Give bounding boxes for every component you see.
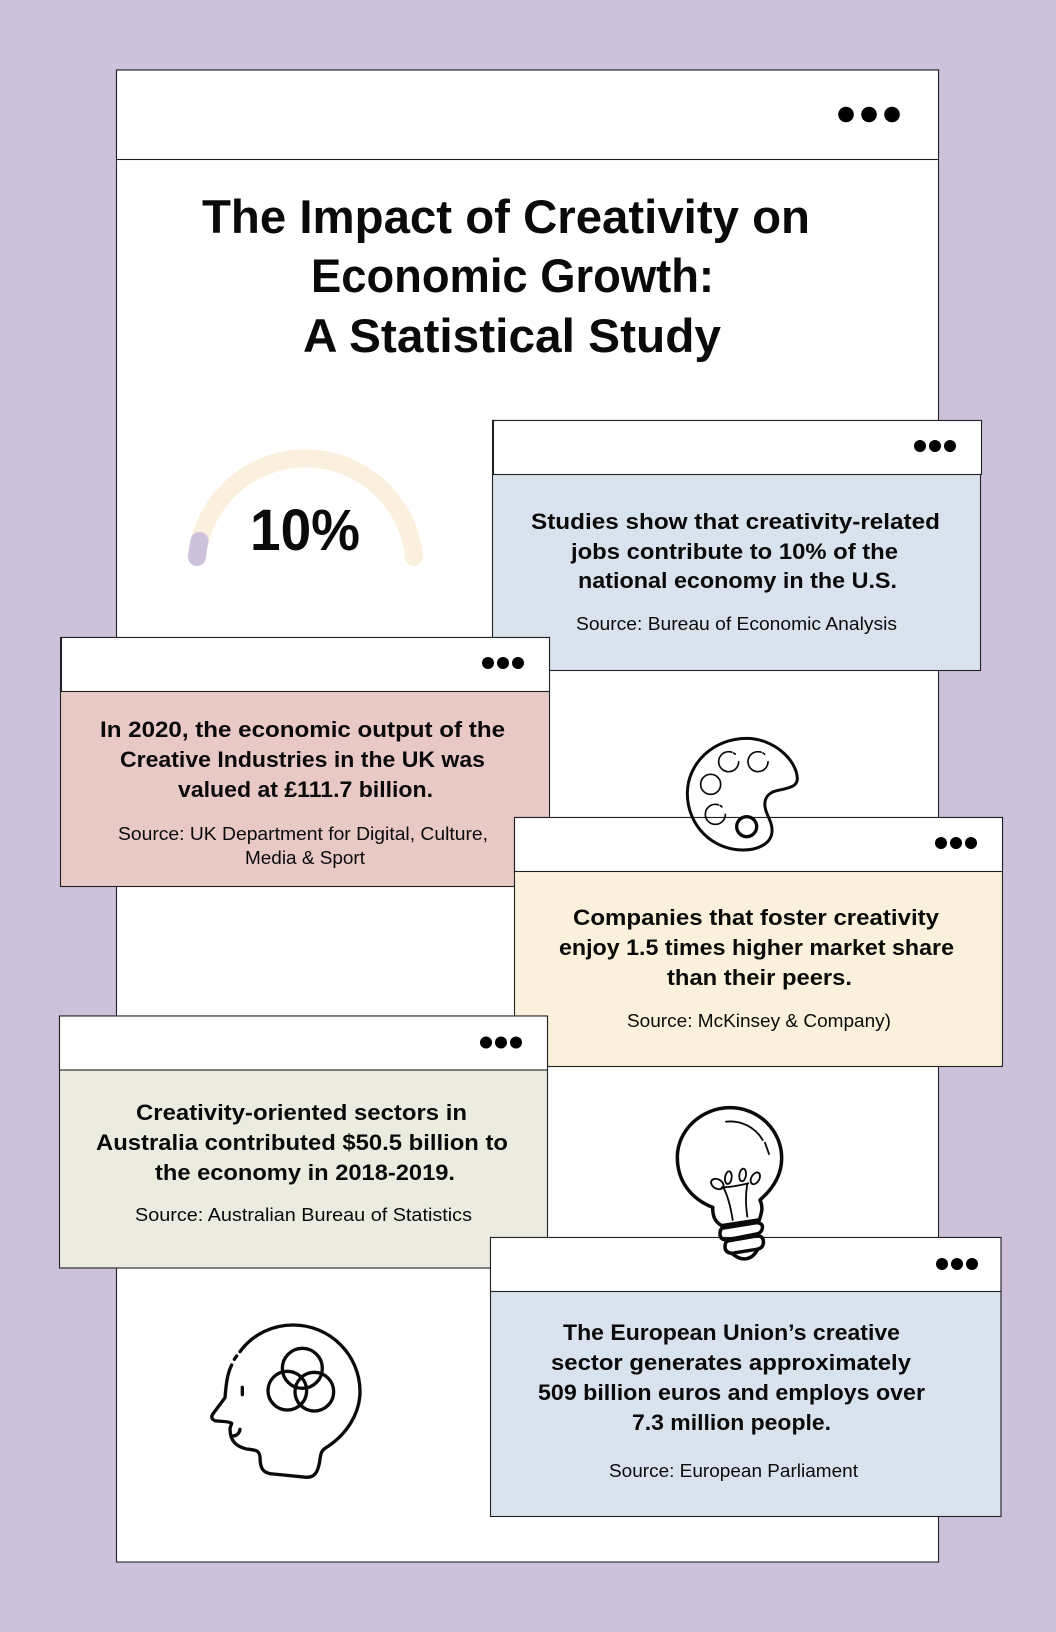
panel: European Union sector: 7.3 million people.: [632, 1410, 831, 1435]
title: The Impact of Creativity on: [202, 190, 810, 243]
panel: Australia sectors: the economy in 2018-2019.: [155, 1160, 455, 1185]
title: Economic Growth:: [311, 249, 714, 302]
panel: companies market share: [514, 818, 1002, 1066]
panel: US creative jobs: Studies show that creativity-related: [531, 509, 940, 534]
panel: UK creative industries: [60, 638, 550, 886]
main panel: [116, 70, 938, 1562]
icon: light bulb: [677, 1108, 782, 1259]
panel: UK creative industries: Creative Industries in the UK was: [120, 747, 485, 772]
icon: head with overlapping circles: [212, 1325, 360, 1477]
panel: European Union sector: The European Union’s creative: [563, 1320, 900, 1345]
panel: European Union sector: [490, 1238, 1001, 1516]
panel: UK creative industries: Source: UK Department for Digital, Culture,: [118, 824, 488, 844]
panel: companies market share: than their peers.: [667, 965, 852, 990]
panel: US creative jobs: Source: Bureau of Economic Analysis: [576, 614, 897, 634]
gauge: 10%: [197, 458, 414, 563]
panel: US creative jobs: jobs contribute to 10% of the: [570, 539, 898, 564]
panel: Australia sectors: Source: Australian Bureau of Statistics: [135, 1205, 472, 1225]
icon: paint palette: [687, 738, 797, 850]
panel: UK creative industries: Media & Sport: [245, 848, 365, 868]
title: A Statistical Study: [303, 309, 721, 362]
panel: UK creative industries: valued at £111.7 billion.: [178, 777, 433, 802]
icon: main window dots: [838, 107, 900, 122]
panel: companies market share: Source: McKinsey & Company): [627, 1011, 891, 1031]
panel: Australia sectors: Creativity-oriented sectors in: [136, 1100, 467, 1125]
panel: US creative jobs: [492, 420, 982, 670]
panel: Australia sectors: [60, 1016, 548, 1268]
panel: European Union sector: 509 billion euros and employs over: [538, 1380, 925, 1405]
panel: European Union sector: sector generates approximately: [551, 1350, 912, 1375]
gauge: 10%: 10%: [250, 498, 360, 563]
panel: European Union sector: Source: European Parliament: [609, 1461, 858, 1481]
title: [202, 190, 810, 362]
panel: Australia sectors: Australia contributed $50.5 billion to: [96, 1130, 508, 1155]
panel: companies market share: enjoy 1.5 times higher market share: [559, 935, 954, 960]
panel: companies market share: Companies that foster creativity: [573, 905, 940, 930]
panel: US creative jobs: national economy in the U.S.: [578, 568, 897, 593]
panel: UK creative industries: In 2020, the economic output of the: [100, 717, 505, 742]
